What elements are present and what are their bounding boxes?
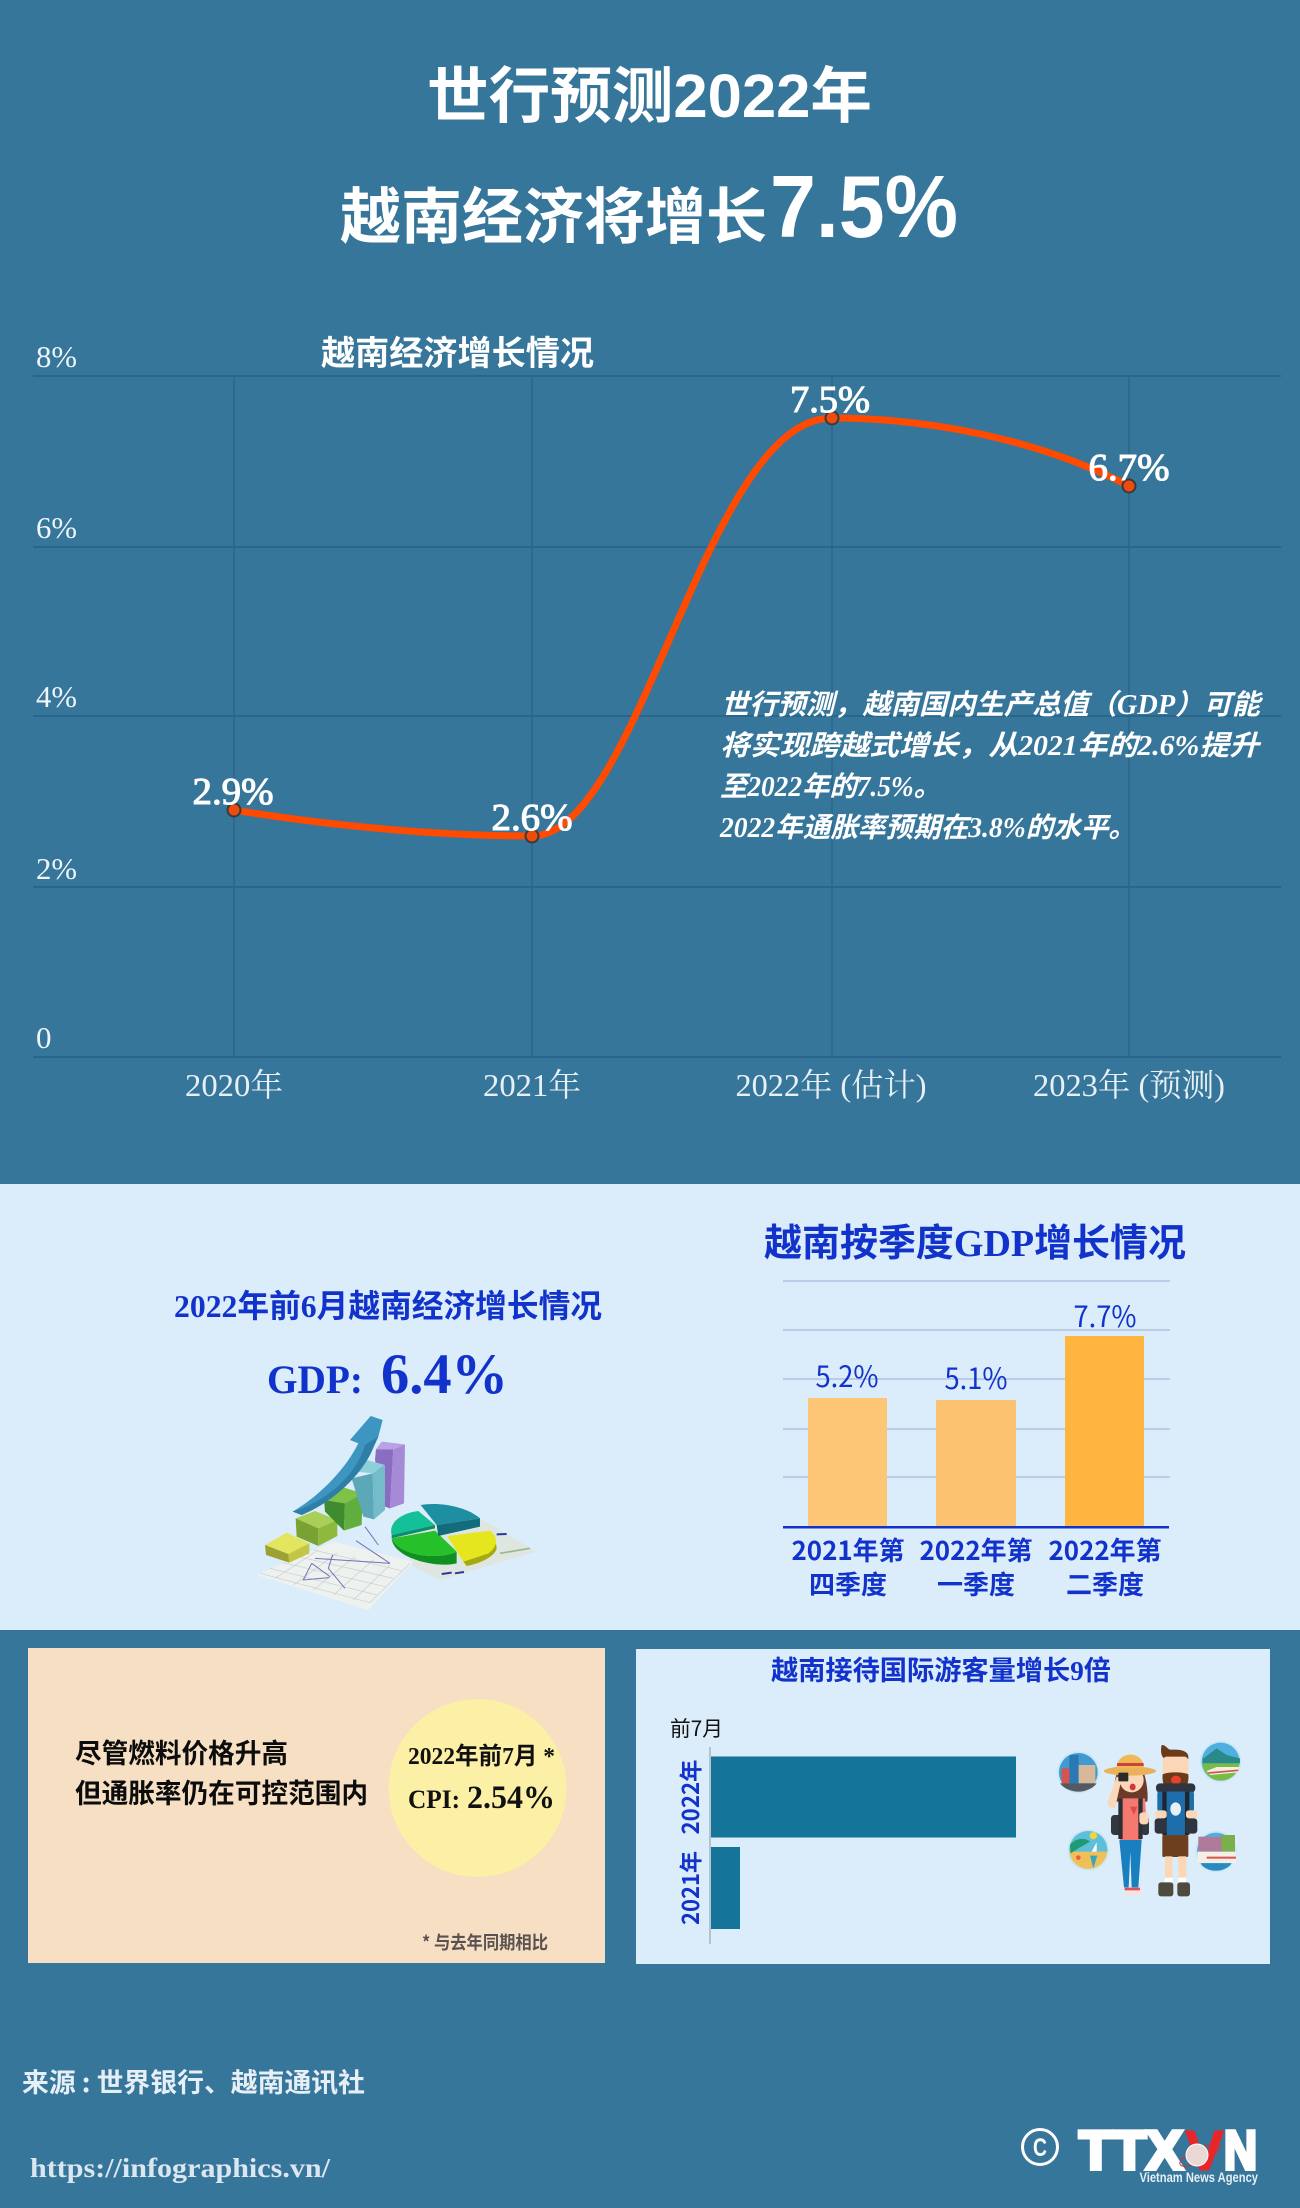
bar categories: 2021年第 <box>792 1531 904 1568</box>
y axis labels: 0 <box>36 1020 52 1055</box>
inflation statement: 尽管燃料价格升高 <box>75 1732 288 1771</box>
logo: TTXVN: Vietnam News Agency <box>1140 2169 1258 2185</box>
title: 越南经济将增长 <box>340 183 767 251</box>
bar values: 7.7% <box>1074 1294 1136 1336</box>
title: 世行预测2022年 <box>427 62 872 130</box>
growth curve <box>234 418 1129 836</box>
chart heading: 越南经济增长情况 <box>321 335 594 373</box>
forecast note: 世行预测，越南国内生产总值（GDP）可能 <box>721 689 1264 721</box>
bar values: 5.2% <box>816 1354 878 1396</box>
bar categories: 二季度 <box>1066 1565 1144 1602</box>
bars <box>808 1336 1144 1527</box>
data labels: 6.7% <box>1088 447 1170 489</box>
CPI circle: 2.54% <box>467 1780 555 1816</box>
bar categories <box>792 1531 1162 1602</box>
CPI circle: 2022年前7月 * <box>408 1743 555 1770</box>
data labels <box>192 379 1170 839</box>
data labels: 2.6% <box>492 797 572 839</box>
man figure <box>1155 1745 1197 1896</box>
x axis labels: 2021年 <box>483 1067 581 1103</box>
forecast note: 至2022年的7.5%。 <box>720 772 941 803</box>
logo: TTXVN: V <box>1185 2119 1224 2183</box>
y axis labels: 2% <box>36 851 77 886</box>
GDP value: GDP: <box>267 1357 363 1402</box>
panel: line chart of Vietnam economic growth <box>33 335 1281 1103</box>
CPI circle: CPI: <box>408 1785 460 1814</box>
logo: TTXVN: N <box>1224 2119 1257 2181</box>
forecast note <box>719 689 1264 844</box>
footnote: * 与去年同期相比 <box>422 1929 548 1955</box>
GDP value <box>267 1343 508 1406</box>
logo: TTXVN <box>1022 2119 1258 2185</box>
data labels: 7.5% <box>790 379 870 421</box>
bar categories: 一季度 <box>937 1565 1015 1602</box>
inflation statement: 但通胀率仍在可控范围内 <box>75 1772 368 1811</box>
icon: tourist couple and destinations <box>1057 1741 1241 1896</box>
panel: tourists card <box>636 1649 1270 1964</box>
x axis labels <box>185 1067 1225 1103</box>
y axis labels: 8% <box>36 339 77 374</box>
forecast note: 2022年通胀率预期在3.8%的水平。 <box>719 813 1136 844</box>
x axis labels: 2022年 (估计) <box>736 1067 926 1103</box>
title <box>340 62 958 256</box>
period label: 前7月 <box>670 1713 723 1743</box>
source line: 来源 : 世界银行、越南通讯社 <box>22 2061 365 2100</box>
rotated year labels: 2021年 <box>672 1851 706 1925</box>
bar values <box>816 1294 1136 1398</box>
GDP value: 6.4% <box>381 1343 508 1406</box>
woman figure <box>1104 1755 1156 1896</box>
y axis labels: 4% <box>36 679 77 714</box>
x axis labels: 2020年 <box>185 1067 283 1103</box>
rotated year labels <box>672 1760 706 1925</box>
data markers <box>228 412 1136 842</box>
rotated year labels: 2022年 <box>672 1760 706 1834</box>
logo: TTXVN: TTX <box>1079 2119 1183 2181</box>
x axis labels: 2023年 (预测) <box>1033 1067 1225 1103</box>
data labels: 2.9% <box>192 771 274 813</box>
panel: GDP light section <box>0 1184 1300 1630</box>
horizontal bars <box>711 1756 1016 1929</box>
bar categories: 四季度 <box>809 1565 887 1602</box>
CPI circle <box>388 1699 566 1877</box>
bar categories: 2022年第 <box>920 1531 1032 1568</box>
panel: CPI card <box>28 1648 605 1963</box>
logo: TTXVN: C <box>1033 2134 1047 2162</box>
GDP first half heading: 2022年前6月越南经济增长情况 <box>174 1288 602 1324</box>
bar categories: 2022年第 <box>1048 1531 1162 1568</box>
bar chart: quarterly GDP growth <box>764 1223 1186 1602</box>
y axis labels: 6% <box>36 510 77 545</box>
bar values: 5.1% <box>944 1356 1008 1398</box>
icon: charts with arrow and pie <box>257 1416 537 1610</box>
website url: https://infographics.vn/ <box>30 2153 331 2183</box>
y axis labels <box>36 339 77 1055</box>
title: 7.5% <box>770 157 958 256</box>
forecast note: 将实现跨越式增长，从2021年的2.6%提升 <box>720 730 1262 762</box>
bar chart heading: 越南按季度GDP增长情况 <box>764 1223 1186 1265</box>
inflation statement <box>75 1732 368 1811</box>
tourists heading: 越南接待国际游客量增长9倍 <box>771 1656 1111 1686</box>
